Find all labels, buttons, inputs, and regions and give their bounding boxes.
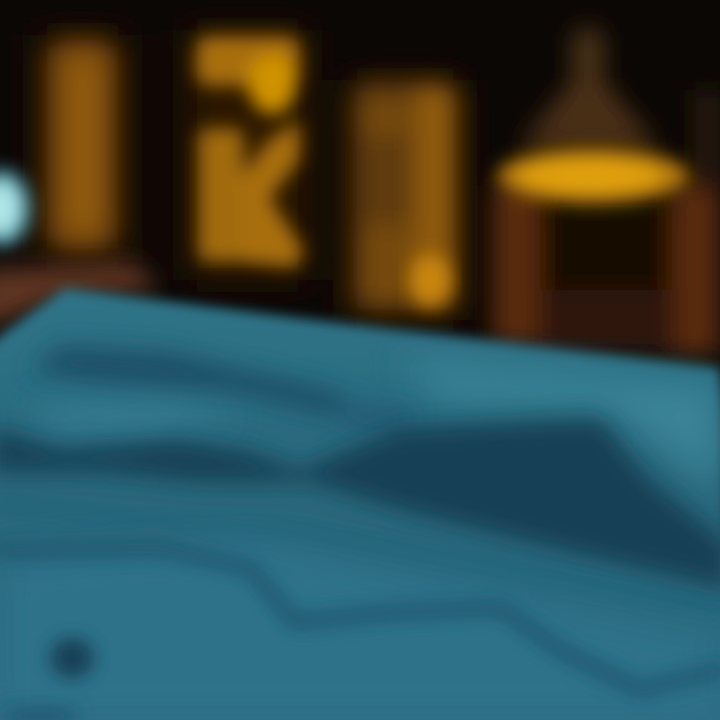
bottle: left amber [48,40,116,250]
bottle: third amber bright spot [410,254,450,306]
bottle: second amber with glyph shapes [196,36,304,268]
mark: small dark blot lower left [0,638,94,720]
lantern: body frame [492,90,720,355]
lamp: pendant neck and shade [518,28,660,148]
bottle: third amber [354,82,456,310]
shelf: warm halos behind bottles [35,30,465,320]
surface: dark wavy band [0,418,720,590]
surface: lower contour lines [0,505,720,690]
glow: pale cyan orb on left edge [0,170,30,246]
surface: brighter top fold [0,360,720,720]
surface: dark script marks upper [30,345,420,435]
surface: teal cloth [0,288,720,720]
surface: brown ledge at left [0,262,160,330]
lamp: glowing yellow disc [497,148,689,204]
